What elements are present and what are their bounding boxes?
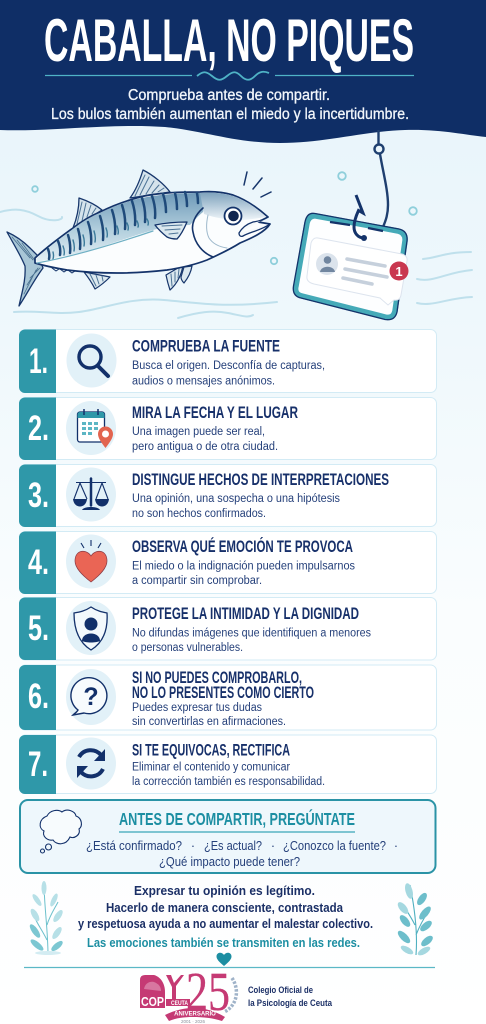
- logo: COP Ceuta 25 aniversario: 2001 · 2026: [181, 1019, 206, 1024]
- finlets: [52, 268, 75, 273]
- step 7 text: Eliminar el contenido y comunicar: [132, 762, 290, 774]
- subtitle: Los bulos también aumentan el miedo y la incertidumbre.: [51, 106, 409, 123]
- message bubble: [307, 238, 407, 305]
- badge: [390, 262, 408, 280]
- closing message: Hacerlo de manera consciente, contrastada: [106, 900, 344, 915]
- panel: step 3: 3.: [28, 476, 49, 515]
- bubbles: [32, 172, 417, 264]
- stripes: [48, 192, 198, 259]
- closing message: Las emociones también se transmiten en las redes.: [87, 935, 360, 950]
- icon: calendar with pin: [66, 401, 116, 455]
- step 6 text: SI NO PUEDES COMPROBARLO,: [132, 669, 302, 687]
- closing message: y respetuosa ayuda a no aumentar el malestar colectivo.: [78, 916, 373, 931]
- step 1 text: audios o mensajes anónimos.: [132, 376, 275, 388]
- step 1 text: Busca el origen. Desconfía de capturas,: [132, 360, 325, 372]
- step 4 text: OBSERVA QUÉ EMOCIÓN TE PROVOCA: [132, 537, 353, 556]
- step 7 text: SI TE EQUIVOCAS, RECTIFICA: [132, 742, 290, 760]
- line and hook shank: [378, 130, 388, 227]
- heading: ANTES DE COMPARTIR, PREGÚNTATE: [119, 808, 355, 829]
- avatar: [316, 253, 338, 275]
- ribbon: [165, 1008, 225, 1021]
- icon: thought cloud: [40, 810, 81, 853]
- questions: ·: [191, 839, 195, 853]
- icon: question bubble: ?: [83, 683, 99, 711]
- water waves: [0, 210, 472, 318]
- step 5 text: o personas vulnerables.: [132, 642, 243, 654]
- organisation name: Colegio Oficial de: [248, 985, 313, 995]
- panel: step 6: [19, 665, 436, 730]
- panel: step 7: [19, 735, 436, 794]
- panel: step 5: 5.: [28, 609, 49, 648]
- panel: step 4: [19, 532, 436, 594]
- hook point: [354, 195, 364, 238]
- step 3 text: [132, 471, 389, 520]
- subtitle: [51, 87, 409, 123]
- step 6 text: NO LO PRESENTES COMO CIERTO: [132, 684, 314, 702]
- head shading: [200, 193, 266, 220]
- panel: step 2: [19, 398, 436, 460]
- icon: magnifier: [66, 334, 116, 388]
- step 2 text: Una imagen puede ser real,: [132, 426, 265, 438]
- icon: question bubble: [66, 669, 116, 725]
- lateral line: [37, 231, 153, 263]
- icon: teal heart: [216, 953, 232, 966]
- closing message: Expresar tu opinión es legítimo.: [134, 883, 315, 898]
- step 3 text: DISTINGUE HECHOS DE INTERPRETACIONES: [132, 471, 389, 489]
- icon: shield with person: [66, 601, 116, 655]
- organisation name: la Psicología de Ceuta: [248, 998, 333, 1008]
- step 4 text: El miedo o la indignación pueden impulsarnos: [132, 560, 355, 572]
- step 5 text: [132, 605, 371, 654]
- step 6 text: Puedes expresar tus dudas: [132, 702, 262, 714]
- step 3 text: Una opinión, una sospecha o una hipótesis: [132, 493, 340, 505]
- step 6 text: sin convertirlas en afirmaciones.: [132, 716, 286, 728]
- logo: COP Ceuta 25 aniversario: COP: [141, 995, 164, 1009]
- illustration: mackerel: [7, 170, 271, 306]
- eye: [224, 208, 242, 224]
- step 1 text: COMPRUEBA LA FUENTE: [132, 338, 280, 356]
- mouth: [239, 217, 270, 236]
- logo: COP Ceuta 25 aniversario: [140, 961, 236, 1024]
- logo: COP Ceuta 25 aniversario: CEUTA: [171, 1000, 188, 1007]
- step 2 text: [132, 404, 298, 453]
- panel: step 4: 4.: [28, 543, 49, 582]
- questions: ¿Conozco la fuente?: [283, 839, 386, 853]
- card slots: [330, 222, 383, 231]
- fins: [130, 170, 170, 198]
- decoration: right plant: [396, 882, 435, 957]
- step 7 text: [132, 742, 325, 788]
- panel: antes de compartir: [20, 800, 436, 873]
- questions: ¿Está confirmado?: [86, 839, 182, 853]
- surprise marks: [244, 172, 271, 197]
- step 5 text: PROTEGE LA INTIMIDAD Y LA DIGNIDAD: [132, 605, 359, 623]
- questions: ·: [271, 839, 275, 853]
- step 7 text: la corrección también es responsabilidad.: [132, 776, 325, 788]
- card: [296, 216, 405, 317]
- organisation name: [248, 985, 333, 1008]
- step 1 text: [132, 338, 325, 388]
- step 2 text: pero antigua o de otra ciudad.: [132, 441, 278, 453]
- step 5 text: No difundas imágenes que identifiquen a menores: [132, 628, 371, 640]
- panel: step 1: 1.: [29, 342, 48, 381]
- panel: step 2: 2.: [28, 409, 49, 448]
- body: [35, 192, 270, 273]
- decoration: left plant: [28, 881, 64, 955]
- text lines: [343, 259, 387, 284]
- panel: step 1: [19, 330, 436, 393]
- step 6 text: [132, 669, 314, 728]
- tail: [7, 232, 43, 306]
- back shading: [36, 193, 203, 262]
- questions: [86, 839, 398, 869]
- laurel: [224, 978, 236, 1012]
- questions: ¿Es actual?: [204, 839, 262, 853]
- header band: [0, 0, 486, 143]
- icon: heart: [66, 534, 116, 588]
- panel: step 3: [19, 464, 436, 527]
- title rule with wave: [45, 72, 414, 80]
- panel: step 5: [19, 598, 436, 660]
- panel: step 6: 6.: [28, 677, 49, 716]
- step 4 text: [132, 537, 355, 587]
- closing message: [78, 883, 373, 950]
- illustration: hook and notification card: [293, 130, 408, 320]
- step 4 text: a compartir sin comprobar.: [132, 575, 262, 587]
- questions: ¿Qué impacto puede tener?: [159, 855, 300, 869]
- icon: refresh arrows: [66, 738, 116, 790]
- illustration: hook and notification card: 1: [395, 264, 403, 279]
- logo: COP Ceuta 25 aniversario: ANIVERSARIO: [174, 1012, 216, 1018]
- step 2 text: MIRA LA FECHA Y EL LUGAR: [132, 404, 298, 422]
- gill: [192, 208, 213, 257]
- subtitle: Comprueba antes de compartir.: [128, 87, 330, 104]
- icon: scales: [66, 468, 116, 522]
- pectoral fin: [155, 222, 187, 239]
- questions: ·: [394, 839, 398, 853]
- panel: step 7: 7.: [28, 745, 48, 784]
- logo: COP Ceuta 25 aniversario: 25: [186, 961, 230, 1022]
- step 3 text: no son hechos confirmados.: [132, 508, 266, 520]
